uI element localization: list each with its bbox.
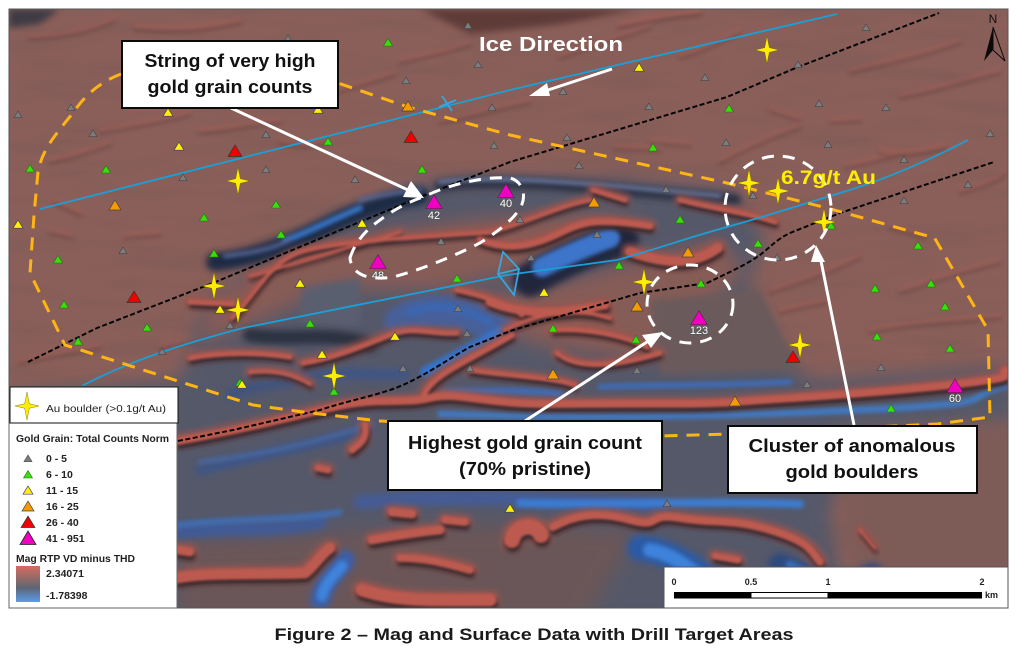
legend: Au boulder (10, 387, 178, 423)
callout: string of very high gold grain counts (122, 41, 338, 108)
callout: string of very high gold grain counts: String of very high (144, 50, 316, 71)
highlight ellipse: string of high counts (350, 178, 524, 278)
legend: gold grain classes: 26 - 40 (46, 517, 79, 529)
label: 6.7 g/t Au: 6.7g/t Au (781, 167, 876, 189)
gold grain samples: 41-951 magenta with counts: 60 (949, 393, 961, 405)
callout: highest gold grain count: Highest gold grain count (408, 432, 642, 453)
gold grain samples: 26-40 red (127, 131, 800, 362)
scale bar: 0.5 (745, 577, 757, 587)
legend: magnetic colour ramp: 2.34071 (46, 568, 84, 580)
gold grain samples: 11-15 yellow (13, 63, 644, 512)
callout: cluster of anomalous gold boulders: gold boulders (786, 461, 918, 482)
legend: magnetic colour ramp: -1.78398 (46, 590, 88, 602)
highlight ellipse: highest count (647, 265, 733, 343)
scale bar: km (985, 590, 998, 600)
structural lines: blue fold axes (40, 14, 968, 387)
scale bar (664, 567, 1008, 608)
legend: Au boulder: Au boulder (>0.1g/t Au) (46, 403, 166, 415)
label: Ice Direction: Ice Direction (479, 33, 623, 56)
callout: highest gold grain count (388, 421, 662, 490)
legend: gold grain classes: 6 - 10 (46, 469, 73, 481)
legend: magnetic colour ramp (16, 553, 135, 602)
north arrow: N (989, 12, 997, 26)
highlight ellipse: boulder cluster (725, 156, 831, 260)
gold grain samples: 41-951 magenta with counts: 40 (500, 198, 512, 210)
legend: gold grain classes: 16 - 25 (46, 501, 79, 513)
arrow: ice direction (529, 69, 612, 96)
gold grain samples: 41-951 magenta with counts: 48 (372, 270, 384, 282)
legend: gold grain classes: 41 - 951 (46, 533, 85, 545)
structural lines: black dashed faults (28, 13, 994, 441)
legend panel (9, 386, 178, 608)
legend: gold grain classes (16, 433, 169, 545)
callout: string of very high gold grain counts: gold grain counts (148, 76, 312, 97)
callout: highest gold grain count: (70% pristine) (459, 458, 591, 479)
legend: gold grain classes: 0 - 5 (46, 453, 67, 465)
arrow: boulder cluster callout pointer (811, 245, 854, 425)
gold grain samples: 41-951 magenta with counts (370, 184, 963, 405)
legend: gold grain classes: 11 - 15 (46, 485, 78, 497)
Au boulder stars (202, 36, 836, 390)
callout: cluster of anomalous gold boulders (728, 426, 977, 493)
target area outline: orange dashed (30, 74, 990, 436)
callout: cluster of anomalous gold boulders: Cluster of anomalous (748, 435, 956, 456)
legend: magnetic colour ramp: Mag RTP VD minus THD (16, 553, 135, 565)
scale bar: 0 (671, 577, 677, 587)
arrow: string callout pointer (231, 108, 424, 198)
legend: gold grain classes: Gold Grain: Total Counts Norm (16, 433, 169, 445)
gold grain samples: 6-10 green (26, 38, 954, 412)
gold grain samples: 0-5 gray (14, 22, 994, 507)
gold grain samples: 41-951 magenta with counts: 42 (428, 210, 440, 222)
gold grain samples: 16-25 orange (109, 101, 741, 406)
scale bar: 2 (979, 577, 985, 587)
figure caption: Figure 2 – Mag and Surface Data with Drill Target Areas (274, 626, 794, 644)
north arrow (984, 12, 1005, 61)
gold grain samples: 41-951 magenta with counts: 123 (690, 325, 708, 337)
scale bar: 1 (825, 577, 831, 587)
arrow: highest count callout pointer (525, 332, 663, 421)
